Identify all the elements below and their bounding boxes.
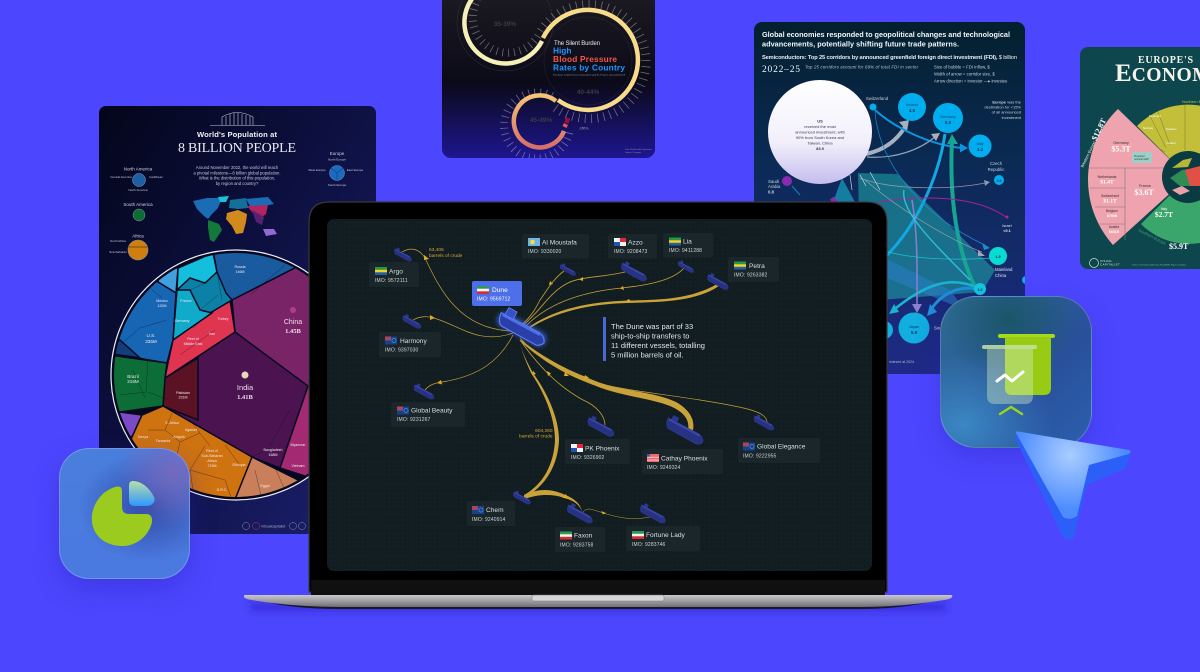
ship: Al Moustafa [559, 262, 578, 277]
bubble: US: announced investment, with [795, 130, 845, 134]
bubble: US: US [817, 118, 823, 124]
chart: population voronoi wheel [110, 249, 308, 501]
bubble: US: 90% from South Korea and [796, 135, 844, 140]
chart: Europe bubble: Europe [330, 151, 345, 156]
chart: Africa bubble: Africa [132, 234, 144, 238]
ship: Global Elegance [752, 413, 776, 431]
bubble: Italy: 3.2 [977, 147, 984, 152]
flow: Azzo [522, 272, 625, 326]
chart: globe hub [1162, 151, 1200, 203]
ship: Petra [706, 272, 731, 291]
logo: Visual Capitalist [1090, 258, 1120, 268]
chart: Northern Europe sector: Ireland [1166, 141, 1176, 145]
label: Lia: IMO: 9411288 [669, 248, 702, 254]
chart: ring 40-44% [543, 10, 638, 110]
flow: Global Elegance [520, 338, 767, 422]
labels: countries: 168M [268, 453, 278, 457]
callout: The Dune summary: 5 million barrels of oil. [611, 350, 684, 360]
legend: encoding: Size of bubble = FDI inflow, $ [934, 64, 990, 70]
laptop hinge strip [311, 580, 885, 595]
bubble: Japan: 5.9 [911, 330, 918, 335]
chart: ring 50%+ [564, 118, 568, 127]
labels: countries: Russia [234, 265, 246, 269]
text: intro paragraph: a pivotal milestone—8 billion global population. [193, 170, 281, 176]
bubble: Saudi Arabia: 0.8 [768, 190, 775, 194]
flow: Argo [402, 249, 513, 331]
labels: countries [127, 265, 306, 492]
ship: Faxon [565, 502, 595, 525]
labels: countries: Middle East [184, 342, 202, 346]
chart: Africa bubble: Sub-Saharan [109, 250, 127, 254]
bubble: Mainland China: 1.9 [995, 255, 1001, 259]
heading: World's Population: World's Population at [197, 130, 277, 139]
text: year range: 2022–25 [762, 65, 800, 75]
cell: Europe south [173, 253, 232, 340]
bubble: Ireland [898, 93, 926, 121]
chart: North America bubble: North America [128, 188, 148, 192]
labels: countries: Rest of [206, 449, 218, 453]
label: Azzo: Azzo [628, 240, 643, 246]
label: India: India [237, 383, 254, 392]
chart: flow arrows [792, 110, 1006, 316]
label: France [1134, 184, 1154, 197]
bubble: Switzerland [866, 96, 889, 110]
label: 63,408 barrels: barrels of crude [429, 253, 463, 259]
label: Global Elegance [738, 438, 820, 463]
bubble: Israel [1002, 216, 1012, 233]
flow: Global Beauty [425, 335, 513, 390]
text: source: Data: World Health Organization [625, 148, 652, 151]
panel: Europe's Economy infographic [1077, 47, 1200, 269]
cell: Africa [132, 406, 252, 497]
heading: 8 Billion People: 8 BILLION PEOPLE [178, 141, 296, 156]
laptop shadow [250, 603, 946, 611]
label: China: 1.45B [285, 328, 302, 335]
labels: countries: France [180, 299, 192, 303]
label: Faxon: IMO: 9283758 [560, 542, 594, 548]
label: Harmony: IMO: 9397030 [385, 348, 419, 354]
bubble: Czech Republic: Czech [990, 161, 1003, 166]
label: Southern Europe arc: Southern Europe [1138, 227, 1167, 246]
icon: 3D cursor arrow [1016, 431, 1131, 540]
icon: glass pie chart tile [59, 448, 190, 579]
labels: countries: Brazil [127, 374, 139, 379]
label: Lia [663, 233, 713, 258]
label: Chem: IMO: 9240914 [472, 517, 506, 523]
chart: tick marks [473, 0, 646, 158]
text: note: Top 25 corridors account for 89% of total FDI in sector [805, 64, 919, 70]
labels: ranges: ≥50% [580, 126, 589, 130]
label: China: China [284, 319, 302, 326]
label: Cathay Phoenix: IMO: 9249324 [647, 465, 681, 471]
label: Lia: Lia [683, 238, 692, 246]
arrowheads [424, 255, 631, 514]
chart: Southern Europe sector: $2.7T [1155, 210, 1173, 219]
label: Al Moustafa: Al Moustafa [542, 240, 577, 246]
ship labels [369, 233, 820, 552]
cell: Southeast Asia [280, 385, 308, 476]
label: Germany: $5.3T [1111, 144, 1131, 154]
labels: countries: Turkey [218, 317, 229, 321]
legend: encoding: Width of arrow = corridor size, $ [934, 72, 995, 76]
label: France: $3.6T [1134, 188, 1154, 197]
chart: Europe bubble [308, 151, 364, 187]
label: Harmony [379, 332, 441, 357]
laptop screen [327, 219, 872, 571]
flow: Fortune Lady to Faxon [582, 509, 650, 519]
labels: countries: Tanzania [156, 439, 170, 443]
label: India [238, 384, 254, 399]
labels: countries: Vietnam [291, 464, 305, 468]
label: PK Phoenix: IMO: 9326902 [571, 455, 605, 461]
labels: countries: 132M [158, 304, 166, 308]
chart: South America bubble [123, 202, 153, 221]
labels: countries: 216M [127, 379, 139, 384]
bubble: Czech Republic [988, 161, 1005, 185]
flow: Petra [526, 284, 719, 330]
heading: Global economies: Global economies responded to geopolitical changes and technological [762, 30, 1010, 39]
labels: countries: Pakistan [176, 391, 190, 395]
bubble: Czech Republic: Republic [988, 167, 1005, 172]
labels: countries: Ethiopia [232, 463, 246, 467]
labels: countries: Myanmar [291, 443, 306, 447]
heading: Europe's: EUROPE'S [1138, 55, 1193, 66]
legend: encoding: Arrow direction = investor ―▸ investee [934, 78, 1008, 84]
bubble: Italy [968, 134, 992, 158]
labels: countries: Bangladesh [264, 448, 282, 452]
bubble: Israel: Israel [1002, 224, 1012, 228]
label: 604,260 barrels [519, 428, 553, 440]
chart: Europe bubble: East Europe [347, 168, 364, 172]
heading: The Silent Burden: The Silent Burden [554, 41, 600, 47]
labels: countries: 335M [145, 339, 157, 344]
flow: Cathay Phoenix [520, 340, 693, 430]
flow: Chem [519, 340, 559, 498]
labels: countries: Uganda [185, 428, 197, 432]
label: Chem: Chem [486, 507, 504, 514]
chart: ring 35-39% [464, 0, 542, 63]
bubble: right edge [1022, 276, 1030, 284]
chart: translucent wedges [830, 173, 995, 310]
laptop lid [309, 202, 887, 592]
footer: social links: /Visualcapitalist [261, 524, 285, 528]
label: Faxon [555, 527, 605, 552]
label: PK Phoenix [565, 439, 630, 464]
label: Argo: Argo [389, 268, 403, 276]
label: Argo: IMO: 9572111 [375, 278, 408, 284]
laptop base underside [270, 603, 926, 609]
label: small countries: $790B [1107, 214, 1118, 218]
chart: Africa bubble [109, 234, 148, 260]
label: Cathay Phoenix [642, 449, 723, 474]
chart: Europe bubble: North Europe [328, 158, 346, 162]
label: 63,408 barrels [429, 247, 463, 259]
cell: Pakistan region [163, 358, 198, 420]
laptop notch [532, 595, 664, 601]
text: intro paragraph: by region and country? [216, 181, 259, 186]
label: Fortune Lady: Fortune Lady [646, 532, 686, 539]
heading: The Silent Burden: High [553, 46, 571, 56]
bubble: Germany [933, 103, 963, 133]
bubble: US: Taiwan, China [807, 140, 833, 146]
cell: Germany France [173, 290, 212, 340]
text: source [625, 148, 652, 154]
label: Harmony: Harmony [400, 338, 427, 345]
icon: glass presentation tile [940, 296, 1092, 448]
chart: Northern Europe sector: Sweden [1166, 127, 1177, 131]
bubble: 1.0 [974, 283, 986, 295]
text: Europe note: destination for <15% [984, 104, 1021, 110]
heading: The Silent Burden: Prevalence of hypertension among adults aged 30–79 years, age-standardized [553, 74, 625, 76]
label: Fortune Lady [626, 526, 700, 551]
bubble: US: received the most [804, 124, 837, 129]
label: 604,260 barrels: barrels of crude [519, 434, 553, 440]
label: Global Elegance: Global Elegance [757, 444, 806, 450]
label: small countries: Netherlands [1098, 175, 1117, 179]
label: Dune [472, 281, 522, 306]
logo: Visual Capitalist: CAPITALIST [1100, 262, 1120, 266]
bubble: Japan [898, 312, 930, 344]
bubble: Mainland China: Mainland [995, 267, 1013, 272]
panel: Semiconductors FDI infographic [754, 22, 1030, 374]
label: small countries [1098, 175, 1120, 234]
bubble: Germany: Germany [940, 115, 956, 119]
cell: North America [116, 282, 176, 362]
flow: Lia [524, 268, 684, 328]
bubble: Saudi Arabia: Arabia [768, 184, 781, 189]
text: intro paragraph: Around November 2022, the world will reach [196, 165, 279, 170]
label: PK Phoenix: PK Phoenix [585, 446, 620, 452]
label: small countries: $1.1T [1103, 198, 1117, 204]
cell: China region [232, 268, 308, 386]
chart: ring 45-49% [514, 95, 564, 147]
heading: Global economies: advancements, potentially shifting future trade patterns. [762, 40, 959, 48]
callout: The Dune summary: The Dune was part of 33 [611, 322, 693, 331]
labels: countries: Angola [173, 435, 185, 439]
ship: Chem [512, 490, 533, 505]
labels: countries: S. Africa [165, 421, 179, 425]
bubble: Saudi Arabia [768, 176, 792, 194]
cell: East Europe [213, 253, 295, 300]
label: small countries: Austria [1109, 225, 1119, 229]
labels: countries: Rest of [187, 337, 199, 341]
text: footnote: indexed at 2024. [889, 360, 915, 364]
label: Petra: IMO: 9263382 [734, 272, 768, 278]
ship: Argo [393, 247, 414, 262]
bubble: left edge [875, 321, 893, 339]
bubble: 1.0: 1.0 [978, 288, 982, 292]
flow: Harmony [413, 317, 513, 337]
ship: Azzo [619, 260, 649, 283]
label: Global Beauty [391, 402, 465, 427]
cell: North Africa [235, 457, 298, 497]
text: South Korea fragment: South Korea [934, 326, 958, 330]
labels: countries: 719M [208, 464, 216, 468]
labels: ranges: 35-39% [494, 21, 516, 28]
label: Global Elegance: IMO: 9222955 [743, 454, 777, 460]
heading: The Silent Burden: Rates by Country [553, 62, 625, 72]
ship: Dune [496, 305, 551, 348]
callout: projected: nominal GDP [1134, 158, 1149, 161]
callout: The Dune summary [603, 317, 705, 361]
label: Al Moustafa [522, 234, 589, 258]
label: Azzo [608, 234, 657, 258]
chart: Western Europe sector [1088, 109, 1188, 245]
labels: countries: D.R.C. [217, 488, 227, 492]
labels: countries: Africa [207, 459, 217, 463]
label: Azzo: IMO: 9208473 [614, 249, 648, 255]
label: small countries: $601B [1109, 230, 1120, 234]
labels: ranges: 40-44% [577, 89, 599, 96]
ship: Cathay Phoenix [664, 413, 707, 446]
chart: Southern Europe sector [1141, 177, 1200, 244]
labels: countries: 146M [236, 270, 244, 274]
ship: PK Phoenix [586, 414, 617, 438]
chart: Southern Europe sector: Italy [1161, 207, 1167, 211]
text: Europe note [984, 100, 1022, 120]
heading: Global economies [762, 30, 1010, 48]
chart: Northern Europe sector: Denmark [1149, 114, 1162, 118]
labels: ranges [494, 21, 599, 130]
bubble: Mainland China [989, 247, 1013, 278]
text: intro paragraph: What is the distribution of this population, [199, 176, 275, 180]
callout: The Dune summary: 11 different vessels, totalling [611, 341, 705, 350]
footer: social links [242, 522, 306, 530]
cell: South America [114, 356, 166, 412]
text: intro paragraph [193, 165, 281, 186]
label: small countries: $1.4T [1100, 178, 1114, 186]
labels: countries: Sub-Saharan [201, 454, 223, 458]
cell: Middle East [165, 300, 235, 378]
label: Al Moustafa: IMO: 9330020 [528, 249, 562, 255]
subheading: semiconductors: Semiconductors: Top 25 corridors by announced greenfield foreign direct investment (FDI), $ billion [762, 55, 1017, 61]
ship: Global Beauty [412, 382, 436, 400]
label: Cathay Phoenix: Cathay Phoenix [661, 456, 708, 462]
chart: North America bubble: Caribbean [149, 175, 163, 179]
chart: Northern Europe sector [1135, 105, 1200, 177]
logo: Visual Capitalist: VISUAL [1100, 259, 1113, 263]
chart: Europe bubble: South Europe [328, 183, 346, 187]
labels: ranges: 45-49% [530, 117, 552, 124]
cell: Central America [158, 268, 178, 293]
chart: world map [193, 196, 277, 242]
callout: projected [1132, 152, 1152, 163]
panel: World's Population infographic [99, 106, 376, 534]
text: source: Source: International Monetary Fund (IMF). Figures rounded [1132, 264, 1185, 266]
labels: countries: Egypt [260, 484, 270, 488]
label: Faxon: Faxon [574, 532, 593, 540]
label: Chem [467, 501, 515, 526]
chart: ship-to-ship transfer flows [402, 249, 767, 519]
chart: North America bubble [110, 166, 163, 192]
labels: countries: Iran [209, 332, 215, 336]
bubble: Israel: <0.1 [1003, 229, 1011, 233]
chart: Europe bubble: West Europe [308, 168, 326, 172]
labels: countries: Mexico [156, 299, 168, 303]
label: Argo [369, 262, 419, 287]
bubble: Czech Republic: 0.6 [997, 179, 1001, 183]
panel: High Blood Pressure infographic [442, 0, 655, 158]
label: Western Europe arc: Western Europe $12.8T [1077, 116, 1108, 169]
laptop base [244, 595, 952, 607]
bubble: Germany: 5.5 [945, 120, 952, 125]
bubble: Switzerland: Switzerland [866, 96, 889, 101]
text: source: Graphic: Pictogram [625, 151, 642, 154]
cell: Oceania [120, 411, 141, 436]
label: Germany [1111, 141, 1131, 154]
text: Europe note: investment [1002, 115, 1022, 120]
chart: North America bubble: Central America [110, 175, 132, 179]
bubble: Italy: Italy [977, 142, 984, 146]
text: Europe note: Europe was the [992, 100, 1022, 104]
cell: Caribbean [116, 339, 141, 358]
bubble: Mainland China: China [995, 273, 1007, 278]
label: Global Beauty: IMO: 9231267 [397, 417, 431, 423]
label: Fortune Lady: IMO: 9283746 [632, 542, 666, 548]
bubble: Ireland: 4.5 [909, 108, 916, 113]
label: France: France [1139, 184, 1151, 188]
labels: countries: 231M [178, 396, 188, 400]
ship: Lia [677, 259, 696, 274]
ships [393, 247, 776, 525]
chart: Northern Europe sector: Norway [1143, 126, 1154, 130]
labels: countries: Germany [175, 319, 190, 323]
bubble: US [768, 80, 872, 184]
chart: South America bubble: South America [123, 202, 153, 207]
heading: The Silent Burden: Blood Pressure [553, 54, 617, 64]
chart: Africa bubble: North Africa [110, 239, 126, 243]
ship: Fortune Lady [638, 502, 668, 525]
legend: encoding [934, 64, 1008, 84]
label: Dune: Dune [492, 287, 508, 294]
flow: Al Moustafa [520, 271, 564, 326]
callout: The Dune summary: ship-to-ship transfers to [611, 332, 689, 340]
bubble: US: 83.9 [816, 146, 825, 151]
label: Dune: IMO: 9569712 [477, 296, 511, 302]
ship: Harmony [401, 313, 423, 330]
bubble: Ireland: Ireland [906, 103, 918, 107]
label: small countries: Belgium [1106, 209, 1118, 213]
label: China [284, 319, 302, 335]
label: India: 1.41B [237, 394, 254, 401]
label: Petra: Petra [749, 263, 765, 270]
flow: Chem to Faxon [525, 490, 582, 512]
callout: projected: Projected [1134, 155, 1145, 158]
labels: countries: U.S. [147, 333, 155, 338]
icon: monument [210, 112, 265, 126]
label: Global Beauty: Global Beauty [411, 408, 453, 414]
label: 604,260 barrels: 604,260 [535, 428, 553, 434]
text: Europe note: of all announced [992, 110, 1021, 114]
bubble: Japan: Japan [909, 325, 919, 329]
label: small countries: Switzerland [1101, 194, 1119, 198]
label: 63,408 barrels: 63,408 [429, 247, 444, 253]
bubble: Saudi Arabia: Saudi [768, 179, 779, 184]
labels: countries: Kenya [138, 435, 148, 439]
flow: PK Phoenix [520, 340, 605, 425]
chart: North America bubble: North America [124, 166, 153, 172]
cell: India region [163, 332, 308, 468]
label: Southern value: $5.9T [1169, 242, 1189, 251]
label: Petra [728, 257, 779, 282]
heading: The Silent Burden [553, 41, 625, 76]
label: Germany: Germany [1113, 141, 1129, 145]
laptop [244, 202, 952, 611]
cell: Europe north cyan [177, 253, 217, 290]
